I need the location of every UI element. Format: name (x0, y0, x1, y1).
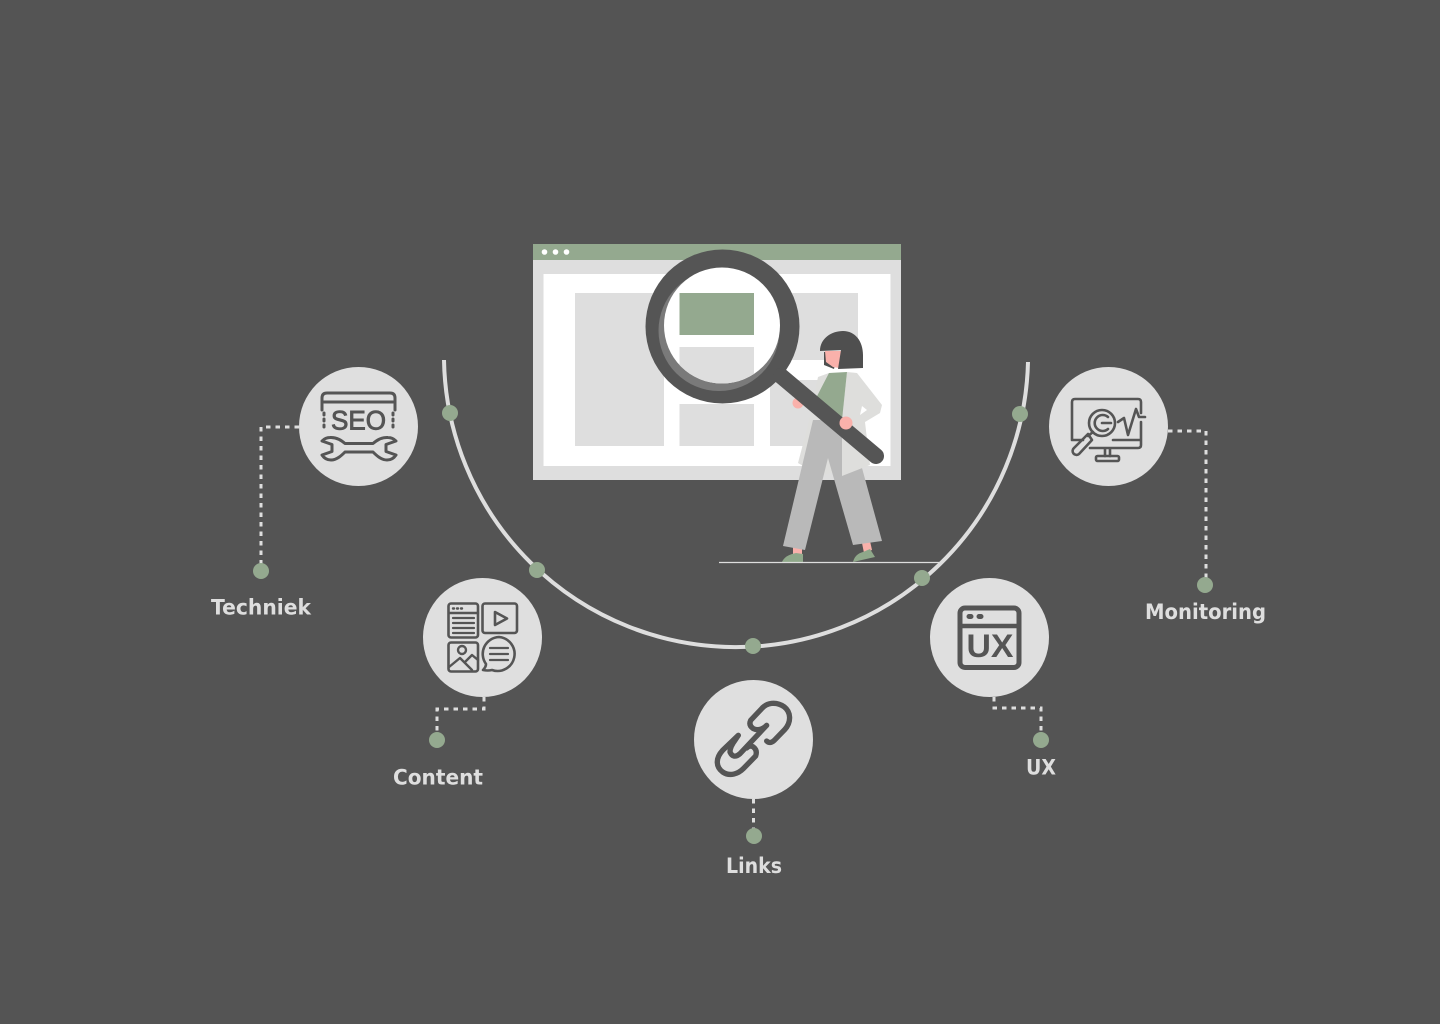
connector: Content (429, 697, 484, 748)
label: Techniek: Techniek (211, 596, 312, 620)
badge: links icon (694, 680, 813, 799)
semicircular arc (444, 360, 1028, 647)
illustration: person (782, 331, 882, 562)
arc nodes (442, 405, 1028, 654)
connector: Techniek (253, 427, 299, 579)
label: Content: Content (393, 766, 483, 790)
infographic (211, 244, 1264, 874)
ground line (719, 562, 940, 564)
badge: UX icon (930, 578, 1049, 697)
badge: SEO icon (299, 367, 418, 486)
badge: monitoring icon (1049, 367, 1168, 486)
connector: UX (994, 697, 1049, 748)
badge: UX icon: UX (966, 628, 1014, 664)
badge: SEO icon: SEO (331, 406, 386, 436)
illustration: browser window (533, 244, 901, 480)
illustration: magnifying glass (646, 250, 876, 456)
label: Monitoring: Monitoring (1145, 600, 1266, 624)
connector: Links (746, 799, 762, 844)
connector: Monitoring (1168, 431, 1213, 593)
label: UX: UX (1026, 756, 1056, 780)
badge: content icon (423, 578, 542, 697)
label: Links: Links (726, 854, 782, 878)
